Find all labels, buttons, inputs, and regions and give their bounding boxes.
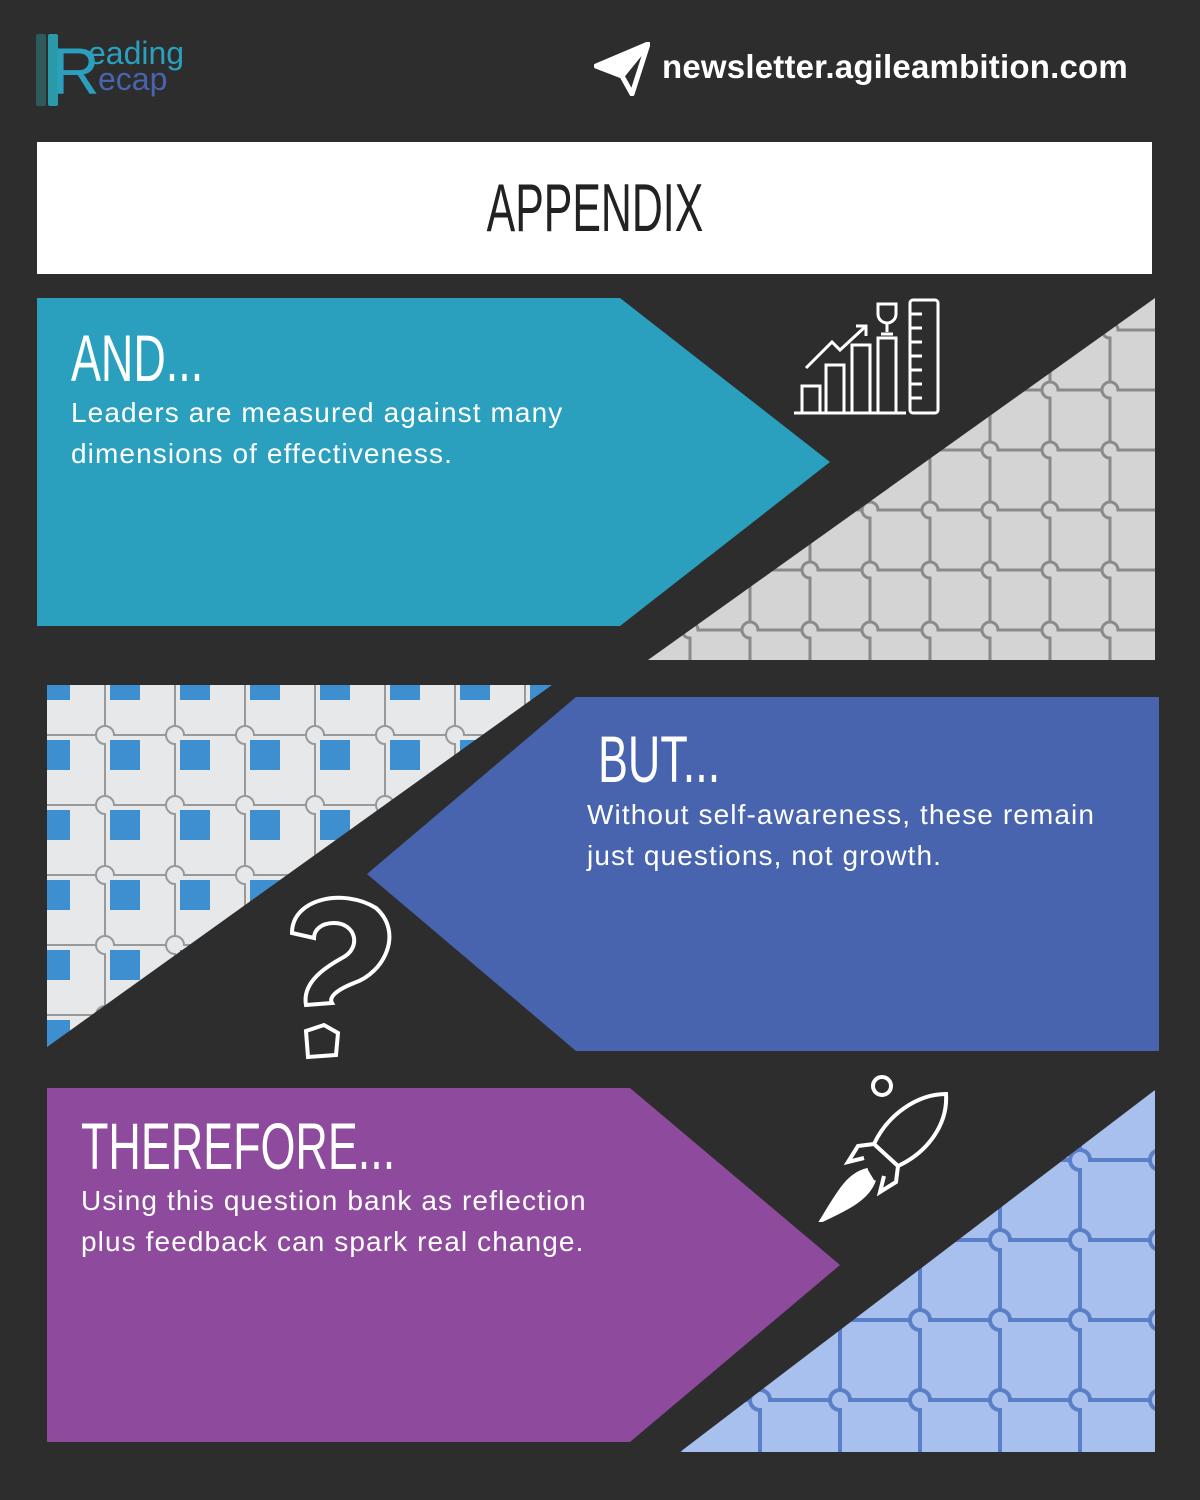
logo: R: [52, 34, 100, 108]
icon: chart with trophy: [794, 298, 940, 414]
text: THEREFORE body: Using this question bank as reflection plus feedback can spark real change.: [81, 1185, 587, 1257]
icon: rocket rider: [818, 1075, 948, 1222]
logo: eading: [88, 35, 184, 71]
heading: AND: AND...: [71, 321, 203, 395]
panel: AND: [37, 298, 830, 626]
heading: BUT: BUT...: [598, 722, 720, 796]
title bar: [37, 142, 1152, 274]
panel: THEREFORE: [47, 1088, 840, 1442]
heading: THEREFORE: THEREFORE...: [81, 1109, 395, 1183]
website url: newsletter.agileambition.com: [662, 48, 1128, 85]
logo: [36, 34, 184, 108]
title bar: APPENDIX: [486, 170, 703, 246]
text: AND body: Leaders are measured against many dimensions of effectiveness.: [71, 397, 563, 469]
logo: ecap: [98, 61, 167, 97]
icon: question mark: [290, 896, 392, 1060]
text: BUT body: Without self-awareness, these remain just questions, not growth.: [587, 799, 1095, 871]
panel: BUT: [367, 697, 1159, 1051]
icon: paper plane: [594, 42, 650, 96]
